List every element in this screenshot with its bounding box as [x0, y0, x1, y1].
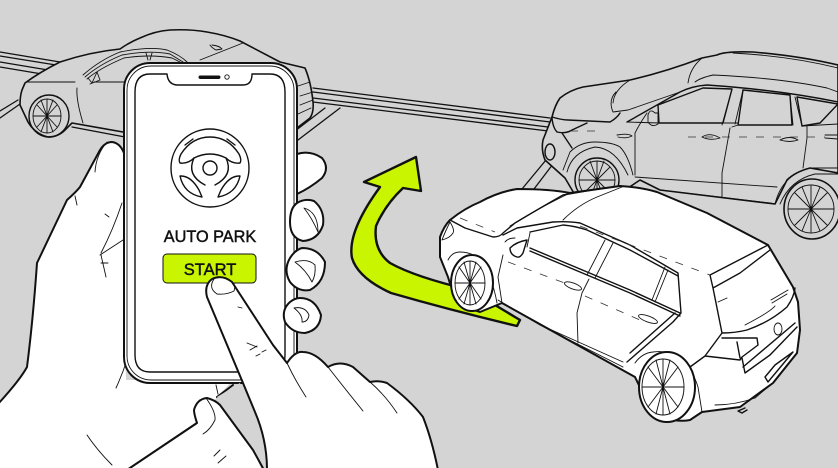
START button — [163, 254, 256, 283]
icon: steering wheel — [171, 129, 249, 207]
START button: START — [184, 261, 236, 279]
lime curved arrow — [351, 157, 520, 326]
right-side fingers gripping phone — [284, 153, 326, 333]
smartphone — [124, 63, 297, 383]
label: AUTO PARK: AUTO PARK — [164, 228, 256, 246]
phone screen with notch — [135, 74, 285, 372]
foreground white hatchback — [440, 186, 800, 422]
parking lot lines — [0, 52, 553, 189]
sedan parked behind phone — [20, 30, 313, 137]
lower thumb — [120, 383, 268, 468]
SUV parked at right — [542, 52, 838, 239]
right hand with pointing index finger — [206, 277, 440, 468]
left hand holding phone — [0, 142, 233, 468]
phone speaker and camera — [199, 75, 229, 79]
